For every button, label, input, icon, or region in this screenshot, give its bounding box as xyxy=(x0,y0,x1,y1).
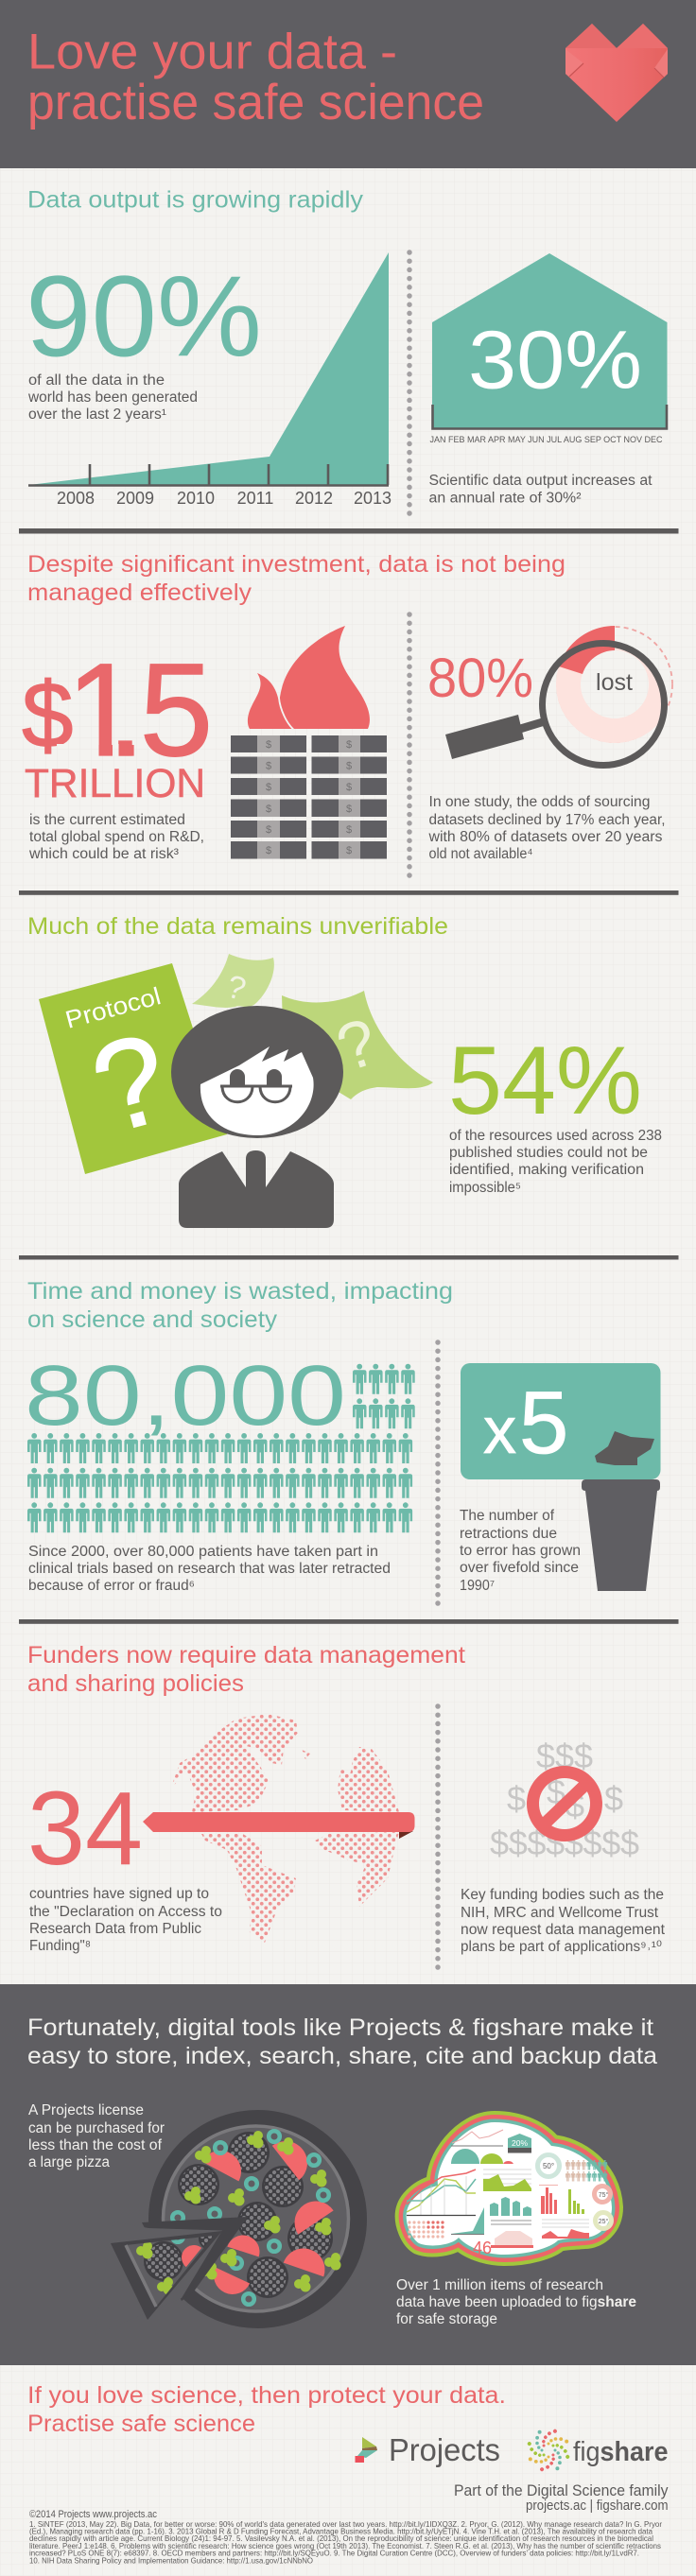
icon: stacks of money: $ xyxy=(266,804,271,815)
text: funding bodies xyxy=(461,1887,666,1955)
icon: stacks of money: $ xyxy=(346,760,352,771)
text: pizza: a large pizza xyxy=(28,2154,110,2170)
panel: data output xyxy=(26,187,668,513)
illustration: small flying sheet: ? xyxy=(223,969,250,1008)
heading: Despite significant investment, data is not being xyxy=(27,551,566,578)
icon: stacks of money: $ xyxy=(346,782,352,793)
text: sourcing datasets: datasets declined by 17% each year, xyxy=(429,812,666,828)
heading: Fortunately, digital tools like Projects & figshare make it xyxy=(27,2014,653,2041)
text: references: declines rapidly with article age. Current Biology (24)1: 94-97. 5. Vasilevsky N.A. et al. (2013), On the reproducibility of science: unique identification of research resources in the biomedical xyxy=(29,2533,653,2543)
text: digital science family: Part of the Digital Science family xyxy=(454,2481,669,2499)
icon: no money: $$$$$$$$ xyxy=(490,1824,639,1862)
text: pizza: A Projects license xyxy=(28,2102,144,2118)
heading: Funders now require data management xyxy=(27,1642,465,1668)
illustration: cloud of charts: 25° xyxy=(599,2218,608,2225)
panel: funders xyxy=(27,1642,666,1968)
text: funding bodies: Key funding bodies such as the xyxy=(461,1887,664,1903)
text: spend description xyxy=(28,812,204,862)
heading: Much of the data remains unverifiable xyxy=(27,913,448,940)
icon: origami heart xyxy=(566,24,668,122)
text: unverifiable description: of the resources used across 238 xyxy=(449,1128,662,1144)
area chart: data growth: 2009 xyxy=(116,489,154,508)
title: practise safe science xyxy=(27,75,484,130)
text: annual rate: Scientific data output increases at xyxy=(429,473,652,489)
illustration: cloud of charts: 75° xyxy=(599,2191,608,2199)
icon: flame xyxy=(248,626,370,731)
stat: 34: 34 xyxy=(27,1771,143,1887)
text: sourcing datasets: with 80% of datasets over 20 years xyxy=(427,829,663,845)
chart: annual growth house: 30% xyxy=(468,314,642,406)
text: annual rate xyxy=(429,473,652,507)
panel: unverifiable xyxy=(27,913,662,1228)
illustration: researcher xyxy=(171,1006,343,1228)
illustration: retracted paper and bin: x5 xyxy=(483,1373,568,1472)
text: spend description: is the current estimated xyxy=(29,812,185,828)
text: retractions: to error has grown xyxy=(460,1543,581,1559)
icon: stacks of money: $ xyxy=(266,845,271,856)
stat: 80%: 80% xyxy=(427,648,533,709)
illustration: cloud of charts: 50° xyxy=(543,2162,554,2170)
text: retractions: retractions due xyxy=(460,1526,557,1542)
illustration: cloud of charts: 20% xyxy=(512,2138,528,2148)
heading: easy to store, index, search, share, cite and backup data xyxy=(27,2043,657,2069)
stat: $1.5 trillion: TRILLION xyxy=(25,761,205,806)
text: figshare uploads: Over 1 million items of research xyxy=(396,2277,603,2293)
chart: annual growth house: JAN FEB MAR APR MAY JUN JUL AUG SEP OCT NOV DEC xyxy=(429,435,663,445)
icon: magnifier over lost data donut: lost xyxy=(596,669,633,696)
text: pizza: less than the cost of xyxy=(28,2137,163,2153)
icon: stacks of money: $ xyxy=(346,804,352,815)
text: references: (Ed.), Managing research data (pp. 1-16). 3. 2013 Global R & D Funding Forecast, Advantage Business Media. http://bit.ly/UyETjN. 4. Vine T.H. et al. (2013), The availability of research data xyxy=(29,2526,652,2535)
icon: no money: $ xyxy=(566,1786,584,1824)
title xyxy=(27,25,484,130)
illustration: cloud of charts xyxy=(407,2122,612,2257)
icon: stacks of money: $ xyxy=(346,739,352,751)
icon: no money: $$$ xyxy=(536,1737,593,1775)
area chart: data growth xyxy=(28,252,392,508)
illustration: large flying sheet xyxy=(282,991,433,1099)
text: patients description: because of error or fraud⁶ xyxy=(28,1578,195,1594)
text: figshare uploads: data have been uploaded to figshare xyxy=(396,2294,636,2310)
text: funding bodies: NIH, MRC and Wellcome Trust xyxy=(461,1905,659,1921)
illustration: large flying sheet: ? xyxy=(328,1004,386,1085)
text: patients description: Since 2000, over 80,000 patients have taken part in xyxy=(28,1544,378,1560)
illustration: protocol book xyxy=(39,963,227,1174)
text: unverifiable description xyxy=(449,1128,662,1196)
text: spend description: total global spend on R&D, xyxy=(29,829,204,845)
heading: Time and money is wasted, impacting xyxy=(27,1278,453,1305)
text: pizza: can be purchased for xyxy=(28,2120,165,2136)
icon: no money xyxy=(490,1737,639,1862)
text: retractions: The number of xyxy=(460,1508,555,1524)
heading: and sharing policies xyxy=(27,1670,244,1697)
text: 90% description: world has been generated xyxy=(27,389,198,406)
panel: digital tools xyxy=(0,1984,696,2365)
text: references: increased? PLoS ONE 8(7): e68397. 8. OECD members and partners: http://bit.ly/SQEyuO. 9. The Digital Curation Centre (DCC), Overview of funders' data policies: http://bit.ly/1LvdR7. xyxy=(29,2549,639,2558)
text: unverifiable description: identified, making verification xyxy=(449,1162,644,1178)
area chart: data growth: 2010 xyxy=(177,489,215,508)
icon: stacks of money: $ xyxy=(346,845,352,856)
icon: stacks of money: $ xyxy=(266,782,271,793)
text: references xyxy=(29,2519,662,2566)
chart: annual growth house xyxy=(429,253,668,445)
pictogram: patients xyxy=(27,1364,415,1532)
text: funding bodies: plans be part of applications⁹˒¹⁰ xyxy=(461,1939,662,1955)
stat: 54%: 54% xyxy=(448,1027,642,1134)
heading xyxy=(27,551,566,606)
text: references: literature. PeerJ 1:e148. 6. Problems with scientific research: How science goes wrong (Oct 19th 2013). The Economist. 7. Steen R.G. et al. (2013), Why has the number of scientific retractions xyxy=(29,2541,661,2550)
panel: time and money xyxy=(25,1278,660,1604)
text: 90% description: of all the data in the xyxy=(28,372,165,389)
icon: magnifier over lost data donut xyxy=(445,626,673,766)
text: references: 1. SiNTEF (2013, May 22). Big Data, for better or worse: 90% of world's data generated over last two years. http://bit.ly/1IDXQ3Z. 2. Pryor, G. (2012). Why manage research data? In G. Pryor xyxy=(29,2519,662,2529)
text: pizza xyxy=(28,2102,165,2170)
text: countries: Research Data from Public xyxy=(29,1921,201,1937)
text: countries: countries have signed up to xyxy=(29,1886,209,1902)
heading xyxy=(27,2382,506,2437)
illustration: protocol book: Protocol xyxy=(62,981,164,1034)
icon: stacks of money: $ xyxy=(266,824,271,836)
illustration: retracted paper and bin xyxy=(461,1363,660,1591)
icon: no money: $ xyxy=(507,1779,526,1818)
text: unverifiable description: published studies could not be xyxy=(449,1145,648,1161)
icon: stacks of money: $ xyxy=(266,739,271,751)
text: patients description: clinical trials based on research that was later retracted xyxy=(28,1561,391,1577)
text: sourcing datasets: In one study, the odds of sourcing xyxy=(429,794,651,810)
heading: on science and society xyxy=(27,1306,278,1333)
icon: stacks of money xyxy=(231,735,387,858)
heading: Data output is growing rapidly xyxy=(27,187,364,214)
text: retractions xyxy=(460,1508,581,1594)
text: retractions: over fivefold since xyxy=(460,1560,579,1576)
panel: header xyxy=(0,0,696,168)
text: countries: the "Declaration on Access to xyxy=(29,1904,222,1920)
title: Love your data - xyxy=(27,25,397,79)
logo: Projects: Projects xyxy=(389,2432,500,2467)
text: spend description: which could be at risk³ xyxy=(28,846,179,862)
text: figshare uploads xyxy=(396,2277,636,2327)
heading: If you love science, then protect your data. xyxy=(27,2382,506,2409)
panel: closing xyxy=(27,2382,669,2566)
area chart: data growth: 2008 xyxy=(57,489,95,508)
area chart: data growth: 2011 xyxy=(237,489,273,508)
text: sourcing datasets xyxy=(427,794,666,862)
text: digital science family: projects.ac | figshare.com xyxy=(526,2498,668,2514)
text: funding bodies: now request data management xyxy=(461,1922,666,1938)
banner arrow xyxy=(143,1812,414,1839)
text: references: 10. NIH Data Sharing Policy and Implementation Guidance: http://1.usa.gov/1cNNbNO xyxy=(29,2556,314,2566)
stat: 80,000: 80,000 xyxy=(25,1349,346,1444)
text: annual rate: an annual rate of 30%² xyxy=(429,490,581,507)
icon: stacks of money: $ xyxy=(346,824,352,836)
illustration: protocol book: ? xyxy=(78,1007,183,1161)
icon: no money: $ xyxy=(547,1772,566,1811)
text: figshare uploads: for safe storage xyxy=(396,2311,497,2327)
heading: Practise safe science xyxy=(27,2411,255,2437)
illustration: dotted world map xyxy=(172,1714,399,1943)
icon: stacks of money: $ xyxy=(266,760,271,771)
text: digital science family xyxy=(454,2481,669,2514)
stat: $1.5 trillion: $1.5 xyxy=(22,635,213,784)
illustration: small flying sheet xyxy=(192,954,274,1008)
text: countries: Funding"⁸ xyxy=(29,1938,91,1954)
text: 90% description xyxy=(27,372,198,423)
text: sourcing datasets: old not available⁴ xyxy=(429,846,533,862)
text: countries xyxy=(29,1886,222,1954)
logo: figshare: figshare xyxy=(573,2437,668,2467)
illustration: cloud of charts: 46 xyxy=(473,2239,492,2257)
area chart: data growth: 2013 xyxy=(354,489,392,508)
illustration: pizza xyxy=(95,2110,367,2335)
logo: figshare xyxy=(525,2427,668,2474)
text: unverifiable description: impossible⁵ xyxy=(449,1180,521,1196)
area chart: data growth: 2012 xyxy=(295,489,333,508)
heading xyxy=(27,1278,453,1333)
text: patients description xyxy=(28,1544,391,1594)
heading xyxy=(27,1642,465,1697)
text: retractions: 1990⁷ xyxy=(460,1578,495,1594)
heading: managed effectively xyxy=(27,579,252,606)
panel: investment xyxy=(22,551,673,877)
heading xyxy=(27,2014,657,2069)
stat: 90%: 90% xyxy=(26,251,262,380)
icon: no money: $ xyxy=(604,1779,623,1818)
text: copyright: ©2014 Projects www.projects.ac xyxy=(29,2509,157,2520)
text: 90% description: over the last 2 years¹ xyxy=(28,406,166,423)
